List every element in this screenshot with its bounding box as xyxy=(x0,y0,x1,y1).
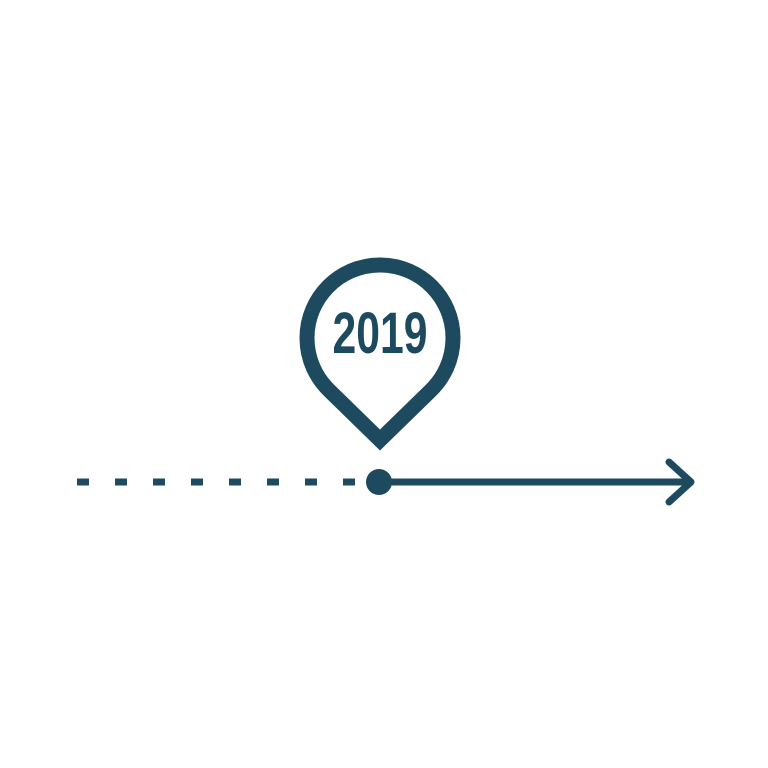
arrow: future timeline xyxy=(379,462,691,502)
year label: 2019 xyxy=(332,301,428,366)
timeline dot xyxy=(366,469,392,495)
dashed past timeline xyxy=(77,478,357,486)
icon: location pin xyxy=(307,265,453,440)
